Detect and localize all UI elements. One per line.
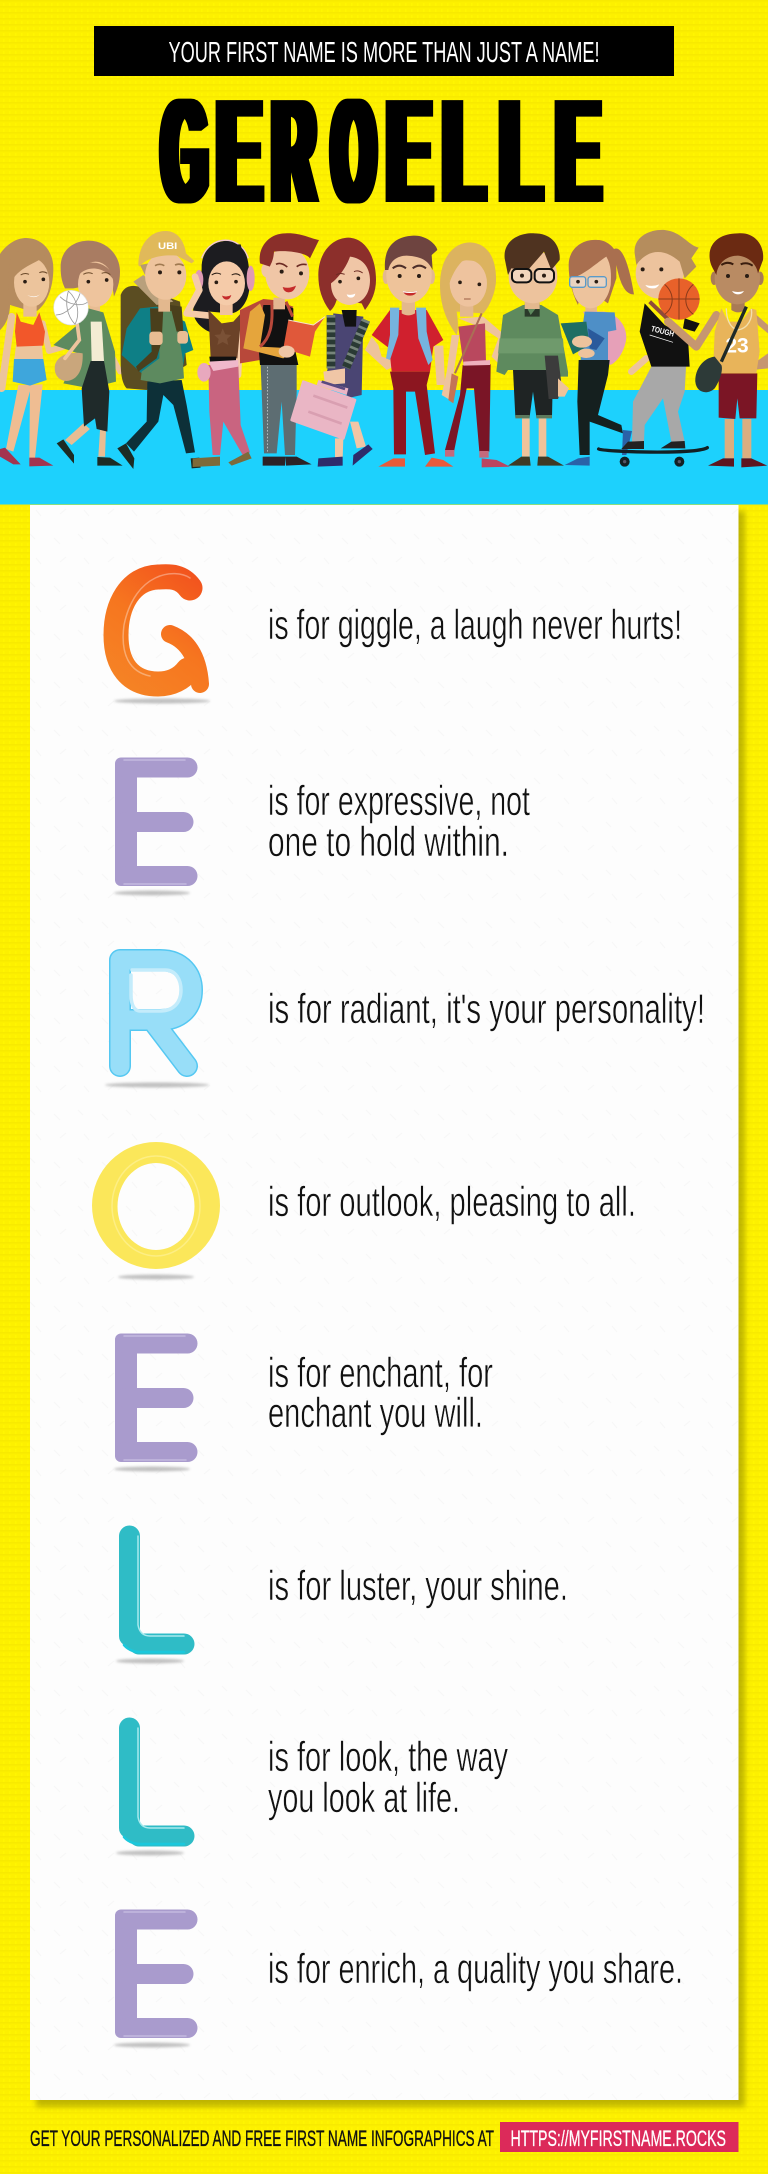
- person: boy in yellow jersey: 23: [725, 333, 749, 357]
- person: boy in red shirt: [365, 236, 453, 467]
- person: blonde girl: [440, 242, 510, 467]
- letter G: [114, 574, 210, 704]
- letter L: [116, 1536, 184, 1664]
- text: L line: is for luster, your shine.: [268, 1562, 568, 1609]
- person: boy with glasses: [496, 233, 569, 466]
- group of people illustration: [0, 230, 768, 469]
- persons 5 to 8: [240, 233, 510, 467]
- panel shadow: [36, 511, 745, 2107]
- letter L: [116, 1728, 184, 1856]
- row: second L: [116, 1728, 508, 1856]
- text: E line: is for expressive, not: [268, 777, 530, 824]
- text: second E line: enchant you will.: [268, 1389, 483, 1436]
- letter E: [114, 1910, 190, 2048]
- text: second L line: is for look, the way: [268, 1733, 508, 1780]
- white letters panel: [30, 505, 738, 2100]
- text: E line: one to hold within.: [268, 818, 509, 865]
- blue floor band: [0, 390, 768, 504]
- person: girl with pink bag: [292, 238, 376, 467]
- title: G: [162, 69, 207, 234]
- persons 1 to 4: [0, 231, 255, 469]
- person: boy in yellow jersey: [695, 233, 768, 467]
- person: skateboarder with basketball: [599, 230, 716, 467]
- row: third E: [114, 1910, 683, 2048]
- title: R: [273, 69, 315, 234]
- footer: [30, 2122, 738, 2152]
- person: girl with volleyball: [53, 241, 123, 466]
- title: E: [217, 69, 261, 234]
- row: E: [114, 758, 530, 896]
- person: hiker with cap and backpack: [117, 231, 201, 469]
- person: girl in orange top: [0, 238, 78, 466]
- row: second E: [114, 1334, 493, 1472]
- letter E: [114, 758, 190, 896]
- title: E: [387, 69, 431, 234]
- title: O: [333, 69, 375, 234]
- row: R: [105, 960, 705, 1088]
- text: second E line: is for enchant, for: [268, 1349, 493, 1396]
- person: boy with backpack and book: [240, 233, 325, 466]
- person: skateboarder with basketball: TOUGH: [650, 324, 675, 339]
- text: E: [556, 69, 600, 234]
- persons 9 to 12: [496, 230, 768, 467]
- person: girl with headphones: [187, 240, 255, 467]
- row: L: [116, 1536, 568, 1664]
- letter O: [92, 1142, 220, 1280]
- title: L: [500, 69, 541, 234]
- footer call to action: GET YOUR PERSONALIZED AND FREE FIRST NAME INFOGRAPHICS AT: [30, 2126, 494, 2151]
- letter R: [105, 960, 209, 1088]
- row: G: [114, 574, 682, 704]
- text: second L line: you look at life.: [268, 1774, 460, 1821]
- title: L: [443, 69, 484, 234]
- person: hiker with cap and backpack: UBI: [158, 241, 177, 251]
- person: girl with ponytail and books: [561, 240, 634, 466]
- row: O: [92, 1142, 636, 1280]
- top banner: [94, 26, 674, 76]
- letter E: [114, 1334, 190, 1472]
